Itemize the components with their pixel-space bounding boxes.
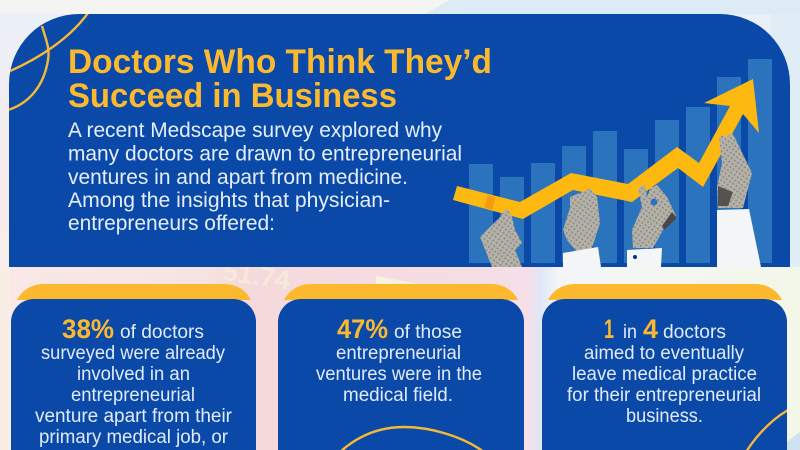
panel: card 1 in 4 [542,284,788,450]
icon: hand holding arrow 2 [563,188,601,267]
intro text: ventures in and apart from medicine. [68,166,408,189]
icon: hand holding arrow 1 [480,208,522,267]
card 3 text: business. [626,406,703,427]
intro text: A recent Medscape survey explored why [68,119,442,142]
card 1 text: primary medical job, or [39,427,229,448]
card 1 text: involved in an [77,364,190,385]
intro text: many doctors are drawn to entrepreneurial [68,142,462,166]
stat: 1 in 4: 4 [643,314,658,344]
icon: hand holding arrow 4 [717,134,761,267]
stat: 38%: 38% [62,314,114,344]
heading: Doctors Who Think They’d [68,43,492,81]
card 3 text: aimed to eventually [584,343,744,364]
card 2 text [316,322,482,406]
heading [68,43,492,115]
card 1 text: of doctors [120,322,204,343]
card 1 text: venture apart from their [35,406,233,427]
card 1 text: surveyed were already [41,343,225,364]
card 3 text: doctors [663,322,726,343]
decorative arc [340,427,484,450]
stat: 47%: 47% [337,314,388,344]
card 2 text: of those [394,322,462,343]
header corner decorative curves [8,13,88,110]
intro text [68,119,462,235]
panel: card 47 percent [278,284,524,450]
icon: hand holding arrow 3 [627,185,677,267]
intro text: Among the insights that physician- [68,189,390,212]
card 2 text: ventures were in the [316,364,482,385]
stat: 1 in 4: 1 [604,314,614,344]
panel: header [8,13,790,267]
decorative arc [746,410,788,450]
stat: 1 in 4 [604,314,658,344]
stat: 1 in 4: in [623,322,637,343]
rising arrow [453,79,759,219]
bar chart [469,59,772,263]
card 2 text: medical field. [343,385,453,406]
panel: card 38 percent [11,284,256,450]
card 2 text: entrepreneurial [336,343,461,364]
heading: Succeed in Business [68,77,397,115]
background: 51.74 [221,256,292,295]
card 1 text: entrepreneurial [71,385,195,406]
card 1 text [35,322,233,448]
card 3 text [567,322,761,427]
intro text: entrepreneurs offered: [68,212,275,235]
card 3 text: for their entrepreneurial [567,385,761,406]
card 3 text: leave medical practice [572,364,757,385]
